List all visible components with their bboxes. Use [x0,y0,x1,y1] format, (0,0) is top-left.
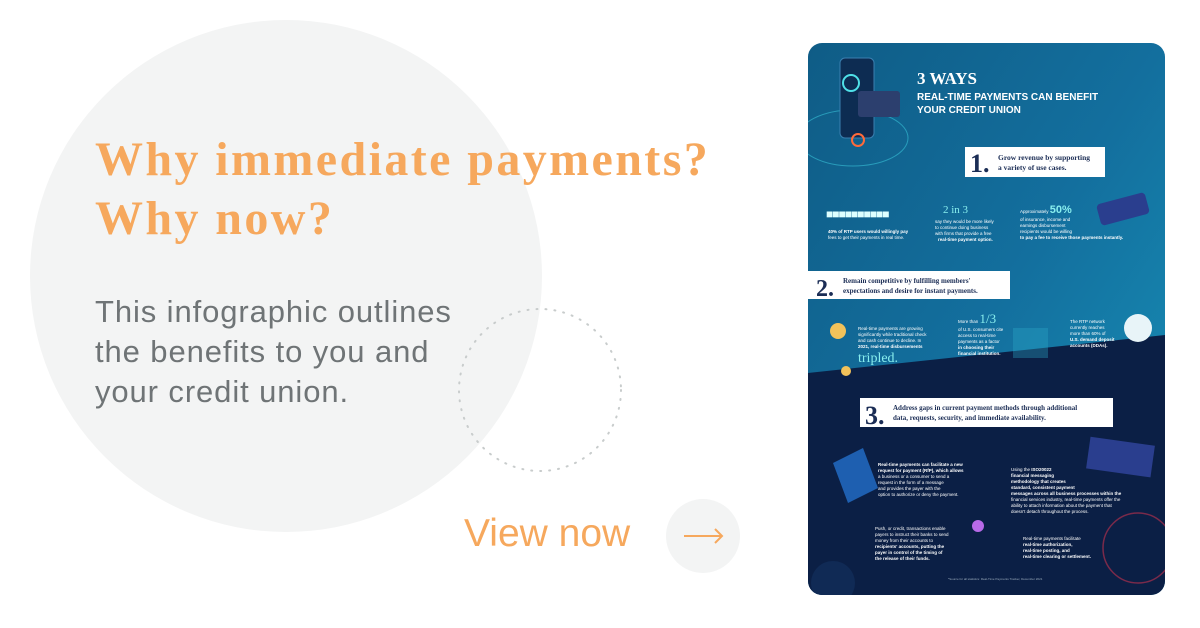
title: Why immediate payments? [95,133,710,186]
section 3 text blocks: financial services industry, real-time payments offer the [1011,497,1121,502]
section 3 text blocks: a business or a consumer to send a [878,474,950,479]
section 3 text blocks: Real-time payments facilitate [1023,536,1081,541]
heading: 3 ways: REAL-TIME PAYMENTS CAN BENEFIT [917,92,1098,103]
section 3 text blocks: real-time clearing or settlement. [1023,554,1091,559]
section 3 text blocks: ability to attach information about the payment that [1011,503,1113,508]
section 3 banner: data, requests, security, and immediate availability. [893,414,1046,422]
section 3 banner [860,398,1113,430]
section 3 text blocks: real-time authorization, [1023,542,1073,547]
section 3 banner: 3. [865,401,884,430]
section 2 banner: 2. [816,276,834,302]
section 1 banner [965,147,1105,178]
section 2 banner [808,271,1010,302]
stats section 2: access to real-time [958,333,996,338]
section 3 text blocks: option to authorize or deny the payment. [878,492,959,497]
dotted circle decoration [458,308,622,472]
stats section 2: accounts (DDAs). [1070,343,1108,348]
section 3 text blocks: recipients' accounts, putting the [875,544,945,549]
heading: 3 ways: YOUR CREDIT UNION [917,105,1021,116]
stats section 2: of U.S. consumers cite [958,327,1004,332]
section 3 text blocks: doesn't detach throughout the process. [1011,509,1089,514]
section 3 text blocks: methodology that creates [1011,479,1066,484]
stats section 2: payments as a factor [958,339,1000,344]
section 3 text blocks: request in the form of a message [878,480,944,485]
section 3 text blocks: real-time posting, and [1023,548,1070,553]
stats section 2: tripled. [858,351,898,366]
section 3 text blocks: and provides the payer with the [878,486,941,491]
section 3 text blocks: financial messaging [1011,473,1054,478]
stats section 1: to continue doing business [935,225,989,230]
section 1 banner: a variety of use cases. [998,163,1067,172]
section 3 text blocks: the release of their funds. [875,556,930,561]
section 3 banner: Address gaps in current payment methods through additional [893,404,1077,412]
stats section 2 [830,311,1152,376]
stats section 1: earnings disbursement [1020,223,1066,228]
section 3 text blocks [833,437,1155,581]
stats section 2: The RTP network [1070,319,1106,324]
illustration: phone and card [798,58,908,166]
section 3 text blocks: *Source for all statistics: Real-Time Payments Tracker, December 2021 [948,577,1043,581]
background circle [30,20,542,532]
stats section 1: with firms that provide a free [935,231,992,236]
description text: This infographic outlines [95,294,452,329]
section 3 text blocks: Real-time payments can facilitate a new [878,462,963,467]
stats section 2: currently reaches [1070,325,1105,330]
section 1 banner: Grow revenue by supporting [998,153,1090,162]
title: Why now? [95,192,334,245]
stats section 1: 2 in 3 [943,204,969,216]
stats section 2: in choosing their [958,345,994,350]
stats section 1: recipients would be willing [1020,229,1073,234]
section 3 text blocks: Using the ISO20022 [1011,467,1052,472]
section 3 text blocks: messages across all business processes within the [1011,491,1122,496]
section 3 text blocks: Push, or credit, transactions enable [875,526,946,531]
description text: the benefits to you and [95,334,429,369]
stats section 1: say they would be more likely [935,219,995,224]
section 3 text blocks: standard, consistent payment [1011,485,1075,490]
stats section 2: financial institution. [958,351,1000,356]
call to action: view now: View now [464,512,630,555]
section 3 text blocks: request for payment (RfP), which allows [878,468,964,473]
title [95,133,710,245]
stats section 1: Approximately 50% [1020,204,1072,216]
icon: arrow button [666,499,740,573]
stats section 1: fees to get their payments in real time. [828,235,904,240]
stats section 1: real-time payment option. [938,237,993,242]
stats section 1: to pay a fee to receive those payments instantly. [1020,235,1123,240]
section 3 text blocks: payers to instruct their banks to send [875,532,949,537]
stats section 1: of insurance, income and [1020,217,1071,222]
infographic panel [808,43,1165,595]
stats section 2: and cash continue to decline. In [858,338,922,343]
description text [95,294,452,409]
section 2 banner: expectations and desire for instant payments. [843,287,978,295]
section 1 banner: 1. [970,149,990,178]
stats section 1: ■■■■■■■■■■ [826,207,889,221]
section 3 text blocks: money from their accounts to [875,538,934,543]
heading: 3 ways [917,69,1098,116]
stats section 1: 40% of RTP users would willingly pay [828,229,909,234]
description text: your credit union. [95,374,349,409]
stats section 2: significantly while traditional check [858,332,927,337]
stats section 2: more than 60% of [1070,331,1106,336]
stats section 2: U.S. demand deposit [1070,337,1115,342]
stats section 1 [826,192,1150,242]
section 2 banner: Remain competitive by fulfilling members' [843,277,971,285]
stats section 2: More than 1/3 [958,311,996,326]
stats section 2: Real-time payments are growing [858,326,923,331]
section 3 text blocks: payer in control of the timing of [875,550,943,555]
stats section 2: 2021, real-time disbursements [858,344,923,349]
heading: 3 ways: 3 WAYS [917,69,977,88]
